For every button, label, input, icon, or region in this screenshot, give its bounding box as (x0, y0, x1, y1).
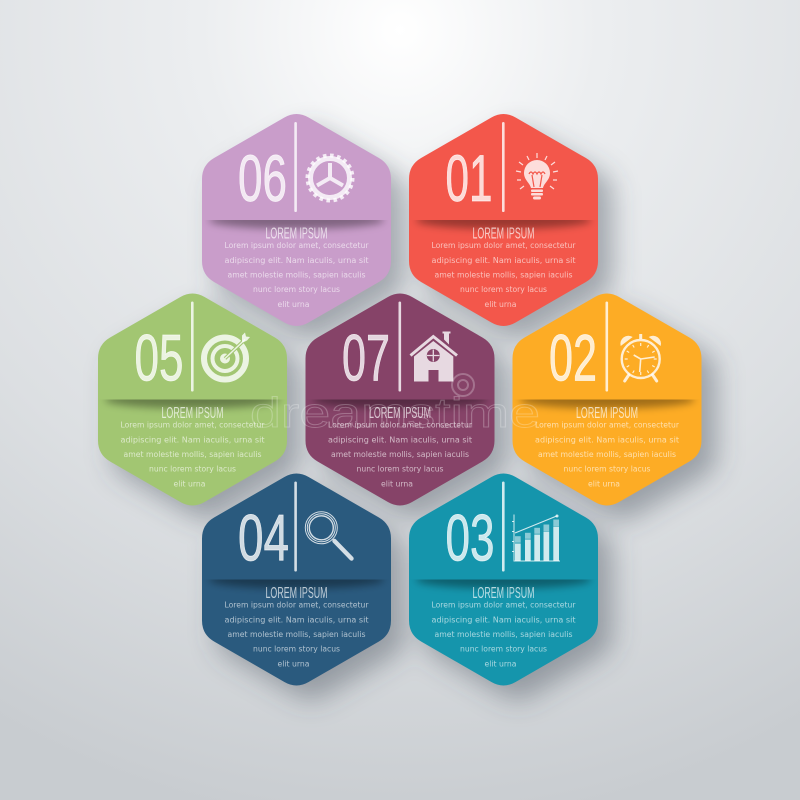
body text: adipiscing elit. Nam iaculis, urna sit (328, 436, 472, 444)
icon: light bulb (516, 153, 558, 200)
panel: 02 time (512, 294, 702, 506)
body text: nunc lorem story lacus (564, 464, 651, 474)
number 05: 05 (134, 320, 184, 394)
number 03: 03 (446, 500, 494, 574)
panel: 01 idea (409, 114, 598, 326)
heading: LOREM IPSUM (266, 585, 328, 602)
panel: 05 target (98, 294, 287, 506)
body text: nunc lorem story lacus (460, 285, 547, 294)
body text: amet molestie mollis, sapien iaculis (228, 270, 366, 280)
body text (328, 420, 473, 488)
body text: amet molestie mollis, sapien iaculis (228, 630, 366, 639)
icon: gear (308, 156, 352, 200)
body text: nunc lorem story lacus (357, 464, 444, 474)
icon: house (410, 332, 457, 382)
body text: Lorem ipsum dolor amet, consectetur (224, 600, 369, 610)
body text: adipiscing elit. Nam iaculis, urna sit (120, 436, 265, 444)
body text (432, 600, 576, 668)
heading: LOREM IPSUM (576, 405, 638, 422)
body text (120, 420, 265, 488)
number 07: 07 (342, 320, 390, 394)
body text (535, 420, 680, 488)
number 02: 02 (549, 320, 597, 394)
body text: adipiscing elit. Nam iaculis, urna sit (224, 256, 369, 265)
panel: 07 home (306, 294, 494, 506)
faint overlay wordmark: dreamstime (250, 389, 540, 436)
body text (432, 241, 576, 309)
number 04: 04 (238, 500, 289, 574)
body text: Lorem ipsum dolor amet, consectetur (328, 420, 473, 430)
body text: amet molestie mollis, sapien iaculis (434, 270, 573, 280)
icon: alarm clock (620, 334, 661, 381)
body text: Lorem ipsum dolor amet, consectetur (535, 420, 680, 430)
body text: adipiscing elit. Nam iaculis, urna sit (432, 256, 576, 265)
body text: adipiscing elit. Nam iaculis, urna sit (535, 436, 679, 444)
body text: elit urna (484, 660, 516, 668)
body text: nunc lorem story lacus (460, 644, 547, 654)
panel: 04 search (202, 474, 391, 686)
body text: Lorem ipsum dolor amet, consectetur (432, 600, 576, 610)
body text: elit urna (174, 480, 206, 488)
heading: LOREM IPSUM (369, 405, 431, 422)
body text: elit urna (278, 660, 310, 668)
body text: elit urna (588, 480, 620, 488)
body text: amet molestie mollis, sapien iaculis (331, 450, 469, 459)
body text: Lorem ipsum dolor amet, consectetur (120, 420, 265, 430)
icon: bar chart with trend line (512, 514, 560, 561)
body text (224, 600, 369, 668)
body text: amet molestie mollis, sapien iaculis (124, 450, 262, 459)
body text: elit urna (484, 300, 516, 309)
body text: nunc lorem story lacus (253, 644, 340, 654)
body text: adipiscing elit. Nam iaculis, urna sit (224, 616, 369, 624)
body text: amet molestie mollis, sapien iaculis (434, 630, 573, 639)
body text: adipiscing elit. Nam iaculis, urna sit (432, 616, 576, 624)
body text: Lorem ipsum dolor amet, consectetur (224, 241, 369, 250)
body text: amet molestie mollis, sapien iaculis (538, 450, 676, 459)
body text: elit urna (381, 480, 413, 488)
hexagon drop shadows (112, 129, 716, 700)
heading: LOREM IPSUM (266, 226, 328, 242)
icon: magnifying glass (305, 512, 352, 558)
heading: LOREM IPSUM (472, 226, 534, 242)
faint overlay wordmark (250, 374, 540, 436)
number 06: 06 (238, 141, 287, 215)
panel: 06 settings (202, 114, 391, 326)
heading: LOREM IPSUM (162, 405, 224, 422)
icon: target with arrow (204, 332, 250, 380)
body text: Lorem ipsum dolor amet, consectetur (432, 241, 576, 250)
body text: nunc lorem story lacus (253, 285, 340, 294)
body text (224, 241, 369, 309)
body text: nunc lorem story lacus (149, 464, 236, 474)
number 01: 01 (446, 141, 492, 215)
panel: 03 growth (409, 474, 598, 686)
heading: LOREM IPSUM (472, 585, 534, 602)
body text: elit urna (278, 300, 310, 309)
